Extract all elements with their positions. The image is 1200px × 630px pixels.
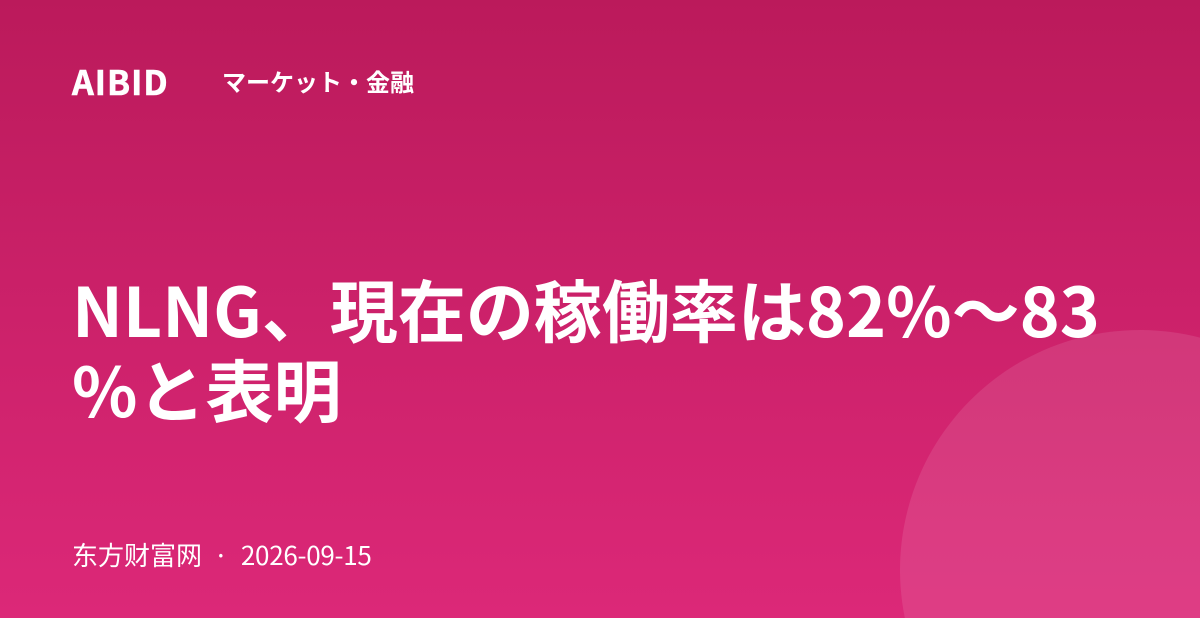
category label: マーケット・金融 <box>222 63 414 98</box>
brand logo text: AIBID <box>72 56 169 105</box>
decorative circle <box>900 330 1200 618</box>
source and date: 东方财富网 · 2026-09-15 <box>72 536 372 573</box>
title <box>72 258 1100 437</box>
title: NLNG、現在の稼働率は82%〜83 <box>72 258 1100 357</box>
title: %と表明 <box>72 338 341 437</box>
